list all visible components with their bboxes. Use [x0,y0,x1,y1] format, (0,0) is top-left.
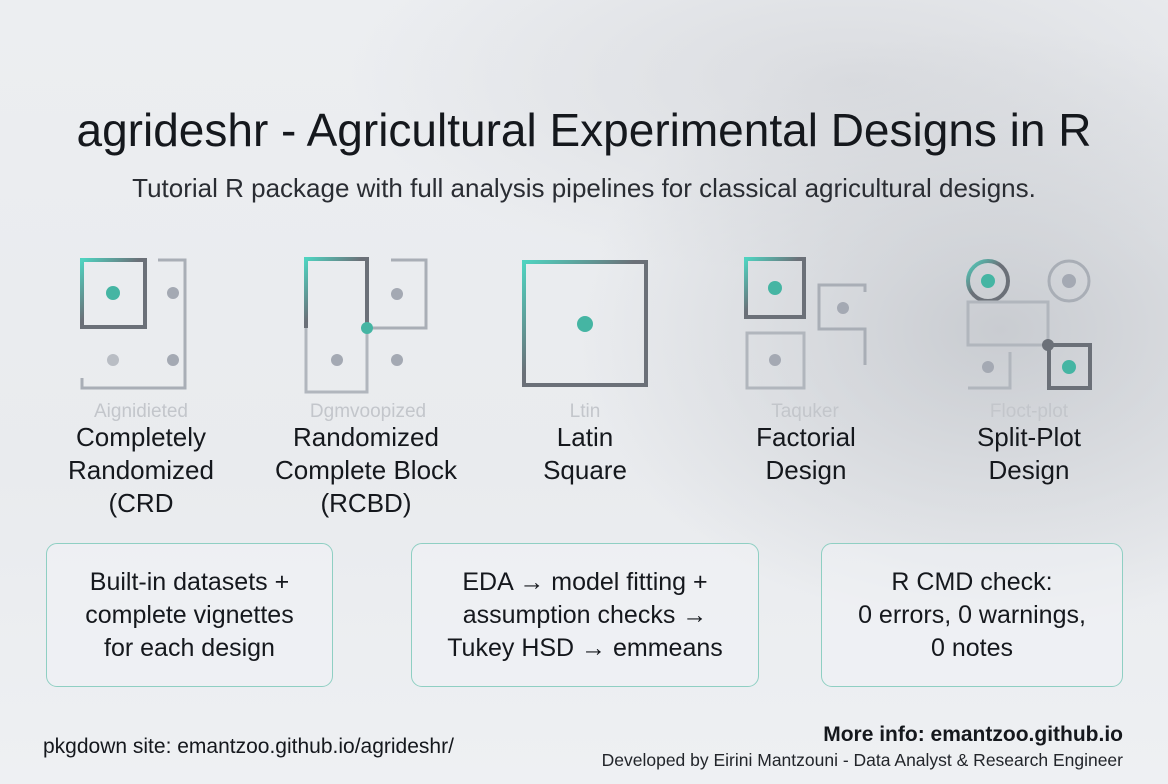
footer: developer: Developed by Eirini Mantzouni - Data Analyst & Research Engineer [602,750,1123,770]
label: RCBD [275,422,457,518]
label: Split-plot [977,422,1081,485]
label: CRD: Completely [76,422,206,452]
label: Latin square: Square [543,455,627,485]
label: Factorial: Factorial [756,422,856,452]
icons row [80,257,1092,394]
subtitle: Tutorial R package with full analysis pipelines for classical agricultural designs. [132,173,1036,203]
ghost captions [94,401,1068,422]
icon: RCBD [306,259,426,392]
box: datasets: for each design [104,634,275,662]
box: datasets: Built-in datasets + [90,568,289,596]
label: CRD [68,422,214,518]
box: pipeline [411,543,759,687]
box: R CMD check: R CMD check: [891,568,1053,596]
label: RCBD: Complete Block [275,455,457,485]
label: Factorial: Design [766,455,846,485]
box: R CMD check: 0 errors, 0 warnings, [858,601,1086,629]
ghost captions: Aignidieted [94,401,188,422]
ghost captions: Taquker [771,401,839,422]
icon: CRD [82,260,185,388]
box: pipeline: EDA → model fitting + [462,568,708,596]
icon: Latin square [524,262,646,385]
footer: more info: More info: emantzoo.github.io [823,723,1123,746]
ghost captions: Ltin [570,401,600,422]
ghost captions: Dgmvoopized [310,401,426,422]
label: RCBD: Randomized [293,422,439,452]
box: R CMD check [821,543,1123,687]
footer: pkgdown: pkgdown site: emantzoo.github.io/agrideshr/ [43,735,454,758]
box: datasets: complete vignettes [85,601,294,629]
label: RCBD: (RCBD) [320,488,412,518]
label: Latin square: Latin [557,422,613,452]
label: Split-plot: Design [989,455,1069,485]
icon: Split-plot [968,261,1090,388]
label: Split-plot: Split-Plot [977,422,1081,452]
icon: Factorial [746,259,865,388]
box: R CMD check: 0 notes [931,634,1013,662]
label: Factorial [756,422,856,485]
label: Latin square [543,422,627,485]
label: CRD: Randomized [68,455,214,485]
ghost captions: Floct-plot [990,401,1068,422]
box: pipeline: assumption checks → [463,601,707,629]
box: datasets [46,543,333,687]
label: CRD: (CRD [108,488,174,518]
title: agrideshr - Agricultural Experimental Designs in R [76,104,1092,156]
box: pipeline: Tukey HSD → emmeans [447,634,723,662]
